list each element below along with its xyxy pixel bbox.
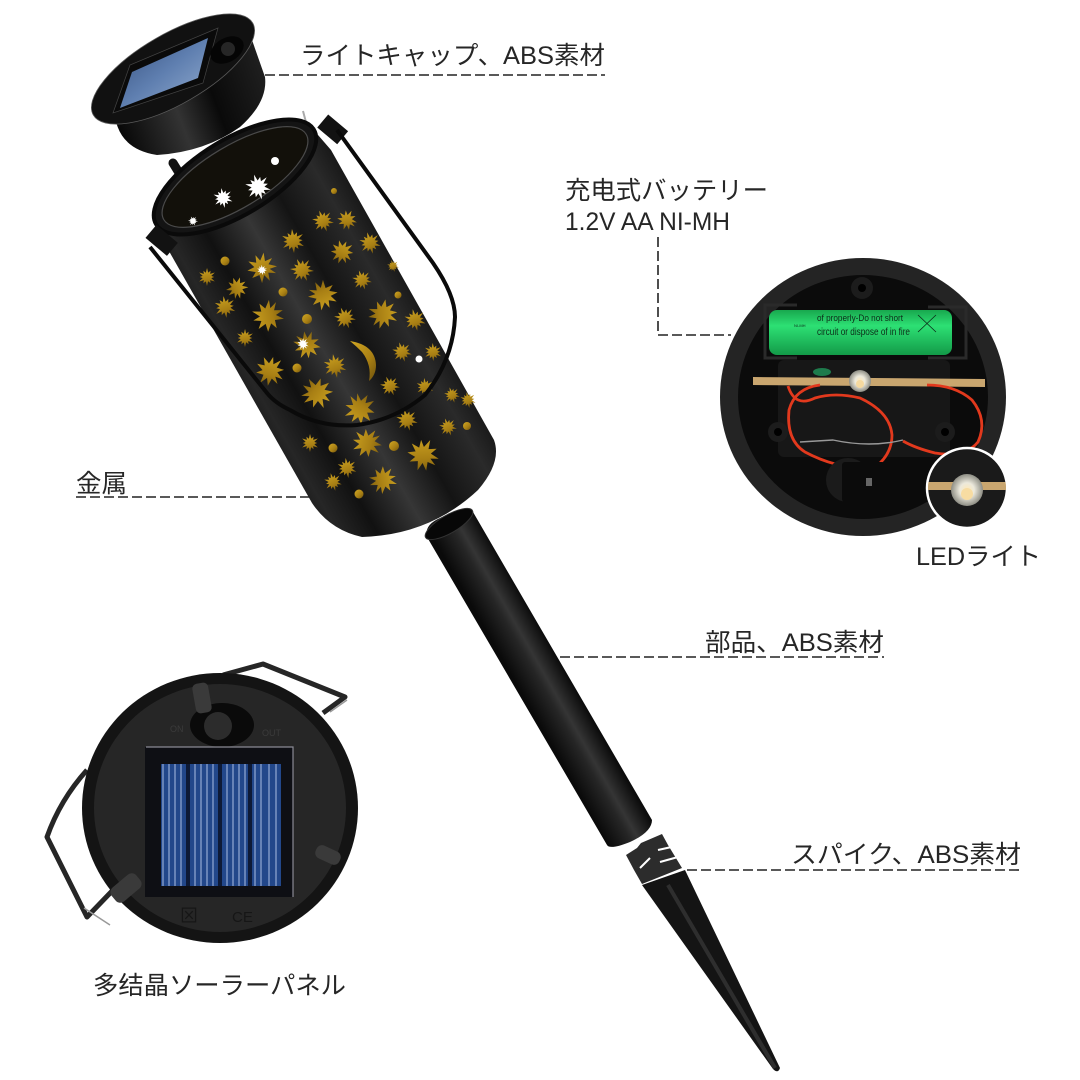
AA battery: of properly-Do not short [817,313,903,324]
star cutouts [195,188,478,499]
label: rechargeable battery: 充电式バッテリー [565,177,768,205]
lantern [137,97,496,537]
battery holder [765,305,966,358]
stake tube [421,503,652,847]
embossed marks [170,724,282,926]
red wires [788,385,982,472]
lantern body [157,135,496,537]
LED close-up [925,448,1010,528]
power switch [826,458,885,502]
label: rechargeable battery: 1.2V AA NI-MH [565,208,730,236]
sensor [190,703,254,747]
cap solar panel [113,28,218,113]
label: light cap: ライトキャップ、ABS素材 [300,42,605,70]
AA battery: circuit or dispose of in fire [817,326,910,338]
label: spike ABS: スパイク、ABS素材 [791,841,1021,869]
AA battery: NI-MH [794,323,806,328]
clips [108,682,343,905]
AA battery [769,310,952,355]
label: parts ABS: 部品、ABS素材 [705,629,884,657]
bottom disc [82,673,358,943]
embossed marks: ON [170,724,184,734]
label: rechargeable battery [565,177,768,335]
embossed marks: OUT [262,728,282,738]
lantern opening [137,97,333,257]
embossed marks: ⊠ [180,906,198,926]
white stars inside [188,157,422,362]
embossed marks: CE [232,909,253,926]
ground spike [626,834,780,1071]
circuit strip [753,377,985,387]
screw posts [768,277,955,442]
brackets [145,115,348,256]
LED [849,370,871,392]
wire handle [150,130,455,425]
bottom handles [47,664,347,925]
spike head [626,834,682,884]
solar cells [145,747,293,897]
battery compartment [720,258,1010,536]
rear pin [173,111,307,176]
label: metal: 金属 [76,470,127,498]
inner box [778,360,950,457]
solar cap [76,0,270,155]
cap light sensor [205,31,249,69]
label: polycrystalline solar panel: 多结晶ソーラーパネル [93,972,346,1000]
solar panel bottom view [47,664,358,943]
diode wire [800,440,903,444]
label: LED light: LEDライト [916,543,1041,571]
